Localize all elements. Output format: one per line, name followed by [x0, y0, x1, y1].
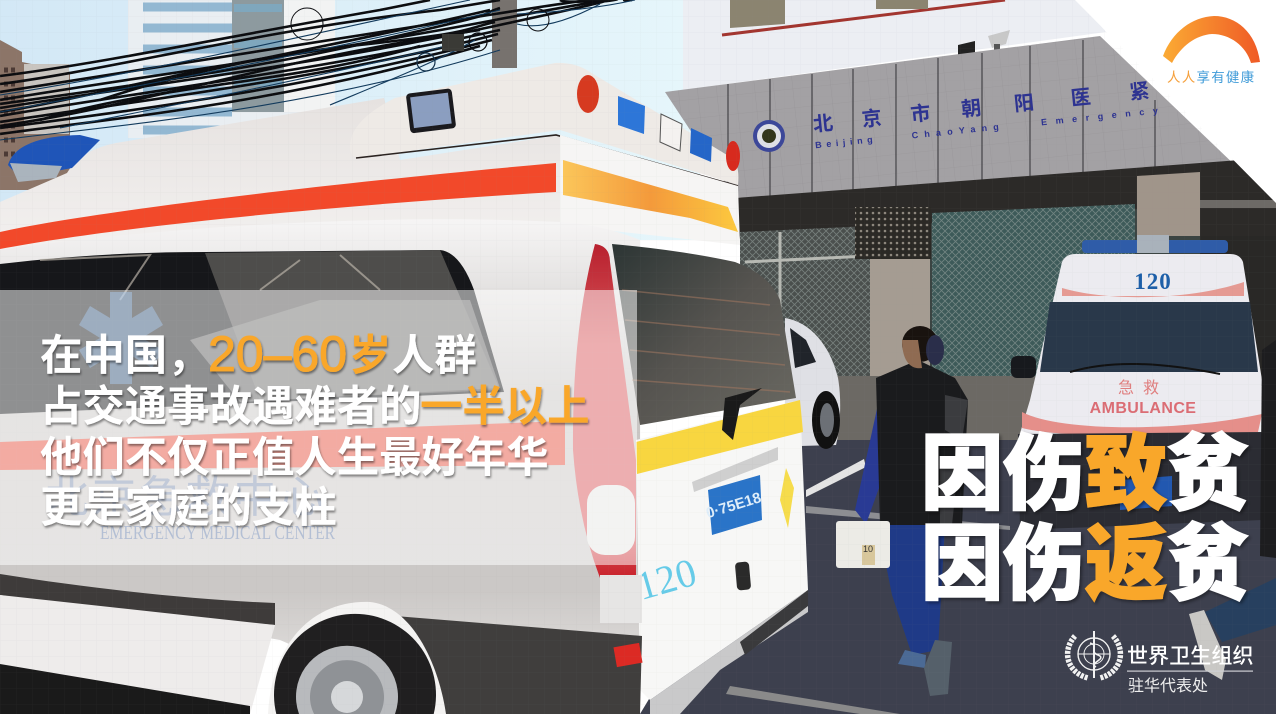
- dark lower trim: [0, 574, 275, 625]
- low wall: [810, 376, 1045, 470]
- building sign lettering: 市: [909, 97, 932, 127]
- overhead wires and pole: [0, 0, 635, 140]
- orange side stripe: [0, 163, 556, 249]
- walking person with first-aid box: 10: [863, 544, 873, 554]
- side window: [0, 250, 504, 414]
- walking person with first-aid box: [836, 326, 968, 696]
- building sign lettering: Emergency: [1041, 105, 1167, 127]
- licence plate: 0·75E18: [704, 489, 763, 522]
- red tail light: [573, 244, 636, 580]
- line 1: 人群: [392, 322, 477, 383]
- side lettering: EMERGENCY MEDICAL CENTER: [100, 522, 336, 544]
- rear 120 marking: 120: [631, 549, 701, 609]
- side lettering: 北京急救中心: [45, 461, 327, 525]
- licence plate: [704, 475, 763, 535]
- line 1: 岁: [349, 322, 391, 383]
- building sign lettering: 京: [860, 102, 883, 132]
- building emblem: [753, 120, 785, 152]
- star of life emblem: [79, 292, 163, 384]
- security cameras: [958, 30, 1010, 60]
- asphalt ground: [640, 440, 1276, 714]
- shaded ceiling band: [735, 160, 1276, 250]
- headline line 2: 因伤: [921, 497, 1085, 616]
- translucent text panel: [0, 290, 637, 565]
- line 1: [40, 322, 477, 383]
- distant ambulance: 急救: [1118, 374, 1168, 398]
- building sign lettering: 紧: [1128, 74, 1151, 105]
- headline line 1: 致: [1085, 407, 1167, 526]
- line 2: 一半以上: [420, 373, 590, 434]
- fences and columns: [740, 172, 1276, 386]
- line 3: 他们不仅正值人生最好年华: [40, 424, 549, 485]
- lower van body: [0, 219, 640, 714]
- line 4: 更是家庭的支柱: [40, 474, 337, 535]
- slogan: [1167, 66, 1255, 86]
- headline line 2: 返: [1085, 497, 1167, 616]
- line 2: 占交通事故遇难者的: [40, 373, 422, 434]
- icon: brush arc: [1163, 16, 1260, 63]
- WHO logo and office name: [1068, 631, 1254, 696]
- building sign lettering: Beijing: [815, 134, 878, 150]
- building sign lettering: 医: [1069, 80, 1092, 111]
- office name: 世界卫生组织: [1127, 640, 1254, 670]
- distant ambulance: AMBULANCE: [1090, 400, 1196, 417]
- roof cap: [350, 63, 738, 185]
- office subtitle: 驻华代表处: [1128, 672, 1208, 696]
- building sign lettering: ChaoYang: [911, 121, 1005, 140]
- slogan: 人人: [1167, 66, 1196, 86]
- slogan: 享有健康: [1196, 66, 1255, 86]
- rear window: [612, 244, 796, 425]
- running person at right edge: [1189, 340, 1276, 680]
- rear door: [636, 400, 808, 700]
- line 1: 在中国，: [40, 322, 210, 383]
- building sign lettering: [811, 73, 1167, 150]
- headline line 1: [921, 407, 1249, 526]
- blue roof beacon: [8, 135, 100, 182]
- icon: WHO emblem: [1068, 631, 1120, 678]
- line 2: [40, 373, 590, 434]
- background buildings: [0, 0, 703, 190]
- building sign lettering: 北: [811, 106, 834, 137]
- yellow rear stripe: [563, 160, 738, 232]
- front wheel: [268, 602, 446, 714]
- parked white car: [785, 318, 840, 449]
- headline line 1: 贫: [1167, 407, 1249, 526]
- hospital building upper wall: [683, 0, 1106, 90]
- van roof: [0, 98, 565, 255]
- sky background: [0, 0, 700, 240]
- headline line 1: 因伤: [921, 407, 1085, 526]
- door handle: [692, 447, 778, 492]
- grey sign fascia: [665, 36, 1240, 198]
- rear upper panel: [560, 135, 740, 245]
- lower body skirt: [0, 595, 275, 714]
- headline line 2: 贫: [1167, 497, 1249, 616]
- distant ambulance: 120: [1134, 269, 1172, 294]
- panel text block: [40, 322, 590, 535]
- line 1: 20–60: [208, 326, 347, 382]
- main headline: [921, 407, 1249, 616]
- building sign lettering: 朝: [960, 91, 983, 122]
- headline line 2: [921, 497, 1249, 616]
- faded side stripe: [0, 421, 565, 470]
- white corner with slogan logo: [1075, 0, 1276, 203]
- building sign lettering: 阳: [1012, 86, 1035, 117]
- main ambulance: [0, 63, 808, 714]
- roof lamps: [406, 75, 740, 171]
- rear bumper: [650, 590, 808, 714]
- distant ambulance: [1011, 235, 1262, 530]
